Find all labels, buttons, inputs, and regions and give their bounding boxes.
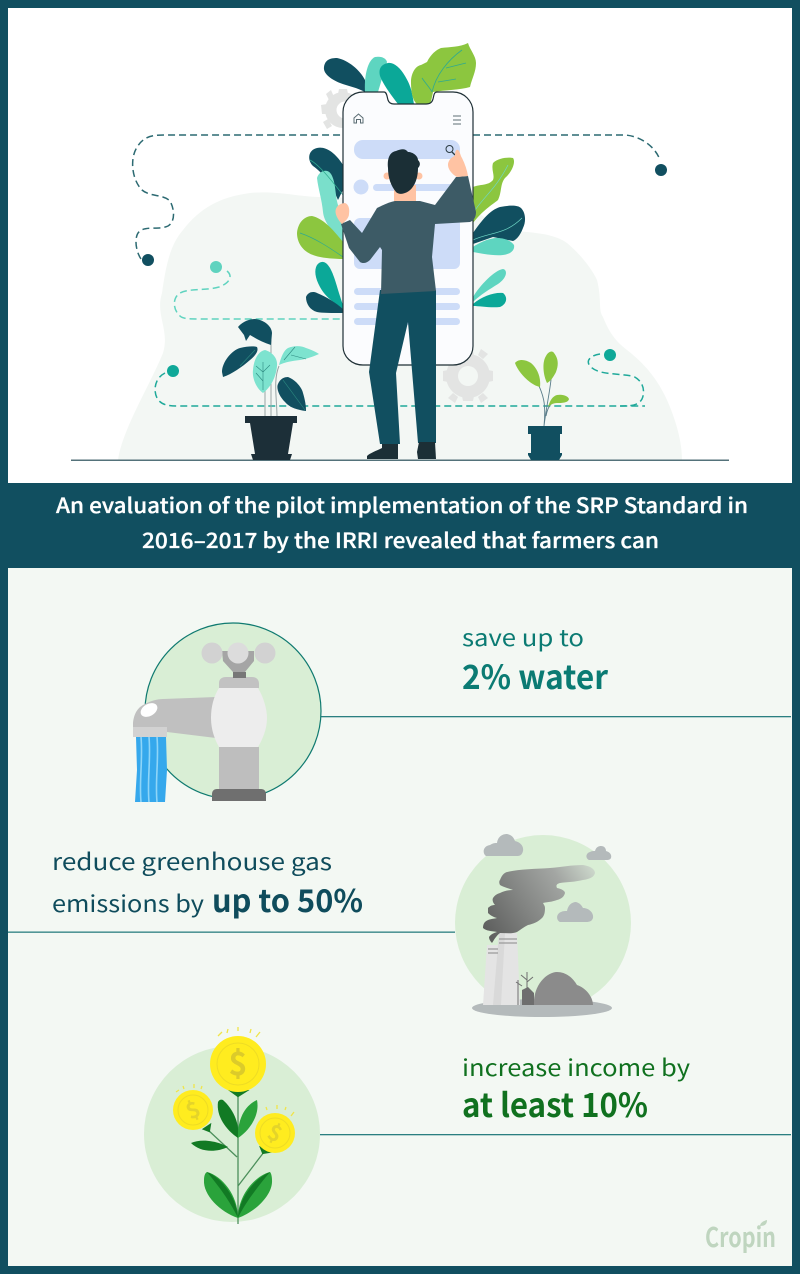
ground line (71, 460, 729, 461)
connector line (320, 1134, 791, 1135)
logo: Cropin: Cropin (705, 1216, 776, 1255)
connector line (321, 716, 791, 717)
headline banner: An evaluation of the pilot implementation of the SRP Standard in (56, 490, 748, 520)
icon: water tap (133, 623, 321, 802)
text: reduce greenhouse gas emissions: up to 50% (212, 876, 363, 921)
text: save up to 2% water: 2% water (462, 651, 609, 699)
leaves behind phone, top (324, 43, 476, 104)
icon: money plant: $ (263, 1115, 288, 1149)
person (336, 149, 476, 459)
clouds (484, 834, 523, 856)
text: save up to 2% water (462, 619, 609, 699)
phone UI elements (354, 114, 461, 325)
headline banner (56, 490, 748, 555)
row: income (144, 1027, 791, 1224)
path end dots (142, 164, 667, 377)
text: increase income: increase income by (462, 1049, 690, 1083)
phone body (343, 92, 473, 365)
potted plant right (515, 352, 569, 460)
leaves right of phone (473, 158, 525, 307)
text: save up to 2% water: save up to (462, 619, 584, 653)
icon: gears (321, 89, 493, 403)
icon: factory smoke (455, 834, 631, 1017)
background blob (118, 192, 682, 460)
text: increase income: at least 10% (462, 1079, 648, 1127)
hero illustration (71, 43, 729, 461)
text: reduce greenhouse gas emissions: emissions by (52, 885, 204, 919)
text: reduce greenhouse gas emissions: reduce greenhouse gas (52, 843, 332, 877)
dashed path: teal lower (155, 373, 645, 406)
icon: money plant: $ (229, 1039, 247, 1085)
potted plant left (222, 319, 319, 460)
leaves left of phone (297, 148, 343, 313)
row: water saving (133, 619, 791, 802)
dashed path: aqua middle (174, 271, 345, 319)
icon: money plant (144, 1027, 320, 1224)
dashed path: navy top (133, 135, 660, 406)
icon: money plant: $ (180, 1092, 205, 1126)
text: reduce greenhouse gas emissions (52, 843, 363, 921)
headline banner: 2016–2017 by the IRRI revealed that farmers can (142, 525, 659, 555)
connector line (8, 932, 455, 933)
row: greenhouse gas (8, 834, 631, 1017)
text: increase income (462, 1049, 690, 1127)
